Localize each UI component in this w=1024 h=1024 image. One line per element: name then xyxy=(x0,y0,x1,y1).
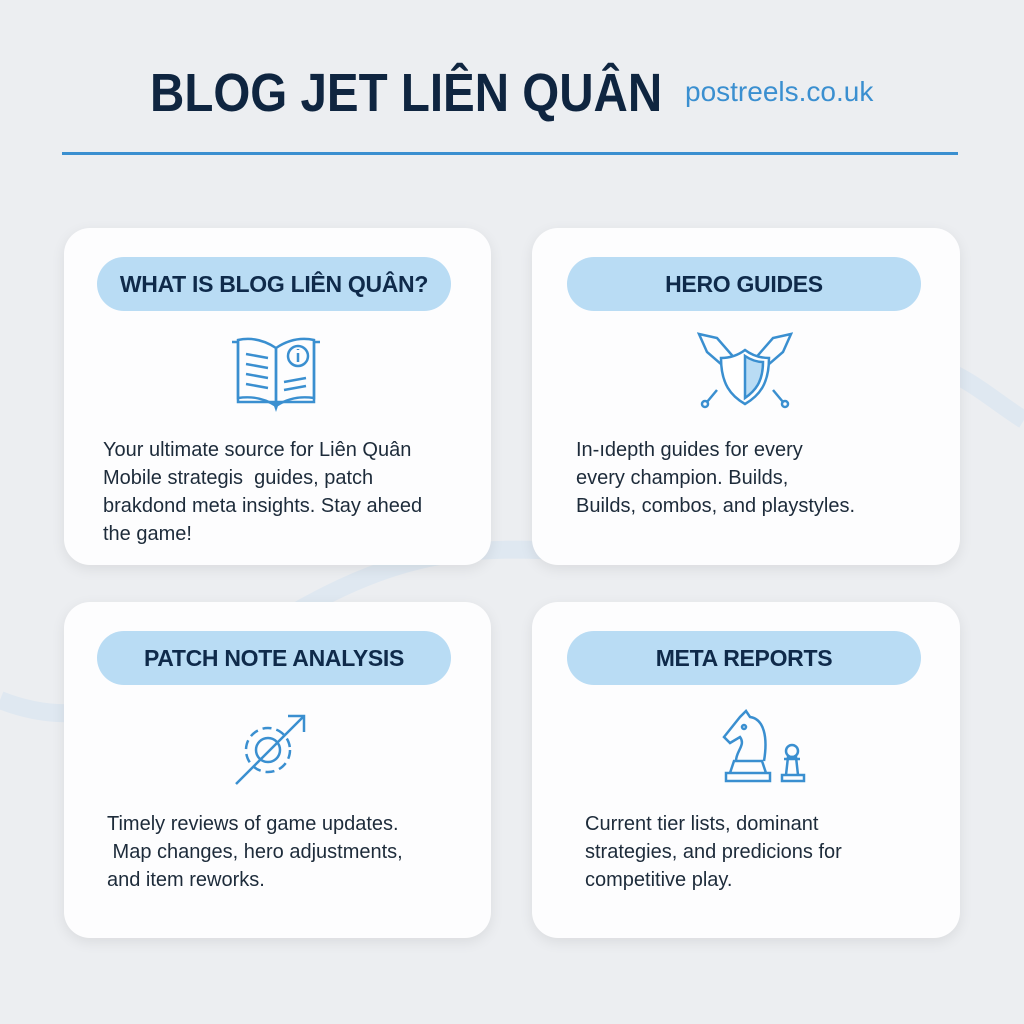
text: Builds, combos, and playstyles. xyxy=(576,495,855,517)
text xyxy=(585,813,842,891)
panel: what is blog xyxy=(64,228,491,565)
text xyxy=(107,813,403,891)
panel: hero guides xyxy=(532,228,960,565)
panel: patch notes xyxy=(64,602,491,938)
text xyxy=(103,439,422,545)
heading: META REPORTS xyxy=(656,644,832,670)
text: Your ultimate source for Liên Quân xyxy=(103,439,411,461)
text: Timely reviews of game updates. xyxy=(107,813,399,835)
heading xyxy=(97,631,451,685)
heading xyxy=(567,631,921,685)
text: Map changes, hero adjustments, xyxy=(113,841,403,863)
title: BLOG JET LIÊN QUÂN xyxy=(150,63,662,123)
text: and item reworks. xyxy=(107,869,265,891)
icon: shield swords xyxy=(697,332,793,408)
heading: PATCH NOTE ANALYSIS xyxy=(144,644,404,670)
heading xyxy=(97,257,451,311)
icon: chess xyxy=(722,709,806,782)
text: competitive play. xyxy=(585,869,732,891)
text: Current tier lists, dominant xyxy=(585,813,818,835)
icon: book xyxy=(232,338,320,412)
text: brakdond meta insights. Stay aheed xyxy=(103,495,422,517)
heading xyxy=(567,257,921,311)
text: the game! xyxy=(103,523,192,545)
text: Mobile strategis guides, patch xyxy=(103,467,373,489)
text: every champion. Builds, xyxy=(576,467,788,489)
text xyxy=(576,439,855,517)
heading: HERO GUIDES xyxy=(665,270,823,296)
icon: gear arrow xyxy=(235,714,306,785)
heading: WHAT IS BLOG LIÊN QUÂN? xyxy=(120,270,428,296)
domain: postreels.co.uk xyxy=(685,76,873,107)
panel: meta reports xyxy=(532,602,960,938)
divider xyxy=(62,152,958,155)
text: strategies, and predicions for xyxy=(585,841,842,863)
text: In-ıdepth guides for every xyxy=(576,439,803,461)
